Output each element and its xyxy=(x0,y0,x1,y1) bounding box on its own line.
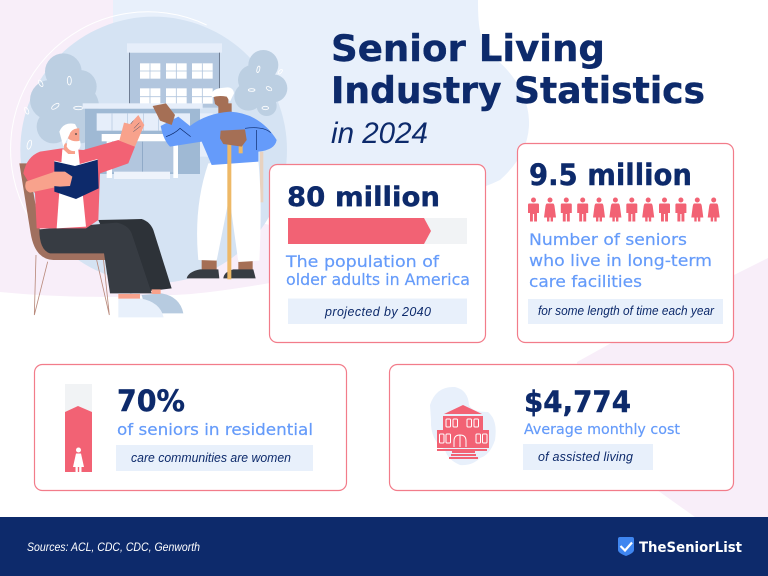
neck xyxy=(64,143,75,154)
note xyxy=(116,445,313,471)
hand on cane xyxy=(220,129,247,147)
note: of assisted living xyxy=(538,450,633,464)
description: older adults in America xyxy=(286,270,470,289)
note xyxy=(523,444,653,470)
card: $4,774 xyxy=(390,364,734,490)
progress bar xyxy=(288,218,467,244)
column chart with woman icon xyxy=(65,384,92,472)
title: Industry Statistics xyxy=(331,69,705,112)
note: projected by 2040 xyxy=(324,305,431,319)
sources: Sources: ACL, CDC, CDC, Genworth xyxy=(27,540,200,554)
chair xyxy=(34,255,109,315)
footer bar xyxy=(0,517,768,576)
raised hand xyxy=(119,115,144,147)
trousers xyxy=(197,161,261,262)
title xyxy=(331,27,705,112)
seated man with book xyxy=(19,115,183,317)
sweater xyxy=(161,112,277,165)
description: care facilities xyxy=(529,272,642,291)
head and beard xyxy=(68,128,79,142)
note: for some length of time each year xyxy=(538,304,715,318)
subtitle: in 2024 xyxy=(331,117,428,150)
back building xyxy=(127,43,222,110)
front leg xyxy=(39,223,152,293)
back leg xyxy=(98,219,172,293)
description xyxy=(529,230,712,291)
people icons xyxy=(528,198,720,222)
open book xyxy=(54,159,99,199)
logo icon xyxy=(618,537,634,556)
shoes xyxy=(187,269,256,278)
shirt xyxy=(57,149,86,228)
statistic: $4,774 xyxy=(524,385,631,419)
left tree xyxy=(30,53,100,143)
backdrop circle xyxy=(20,17,287,283)
illustration: seniors in front of a care community xyxy=(11,12,287,317)
description: Number of seniors xyxy=(529,230,687,249)
note xyxy=(288,298,467,324)
description: of seniors in residential xyxy=(117,420,313,439)
description xyxy=(285,252,470,289)
feet xyxy=(202,258,253,271)
right tree xyxy=(234,50,287,116)
note: care communities are women xyxy=(131,451,291,465)
shoes xyxy=(142,293,183,313)
logo wordmark: TheSeniorList xyxy=(639,540,742,556)
description: The population of xyxy=(285,252,439,271)
card: 70% xyxy=(34,364,346,490)
statistic: 9.5 million xyxy=(529,158,692,192)
note xyxy=(528,299,723,324)
card: 80 million xyxy=(270,164,486,342)
neck xyxy=(218,103,232,115)
raised hand xyxy=(153,103,175,125)
description: who live in long-term xyxy=(529,251,712,270)
back cane shadow xyxy=(260,152,263,202)
forearm xyxy=(25,172,58,193)
cane xyxy=(227,143,231,279)
statistic: 80 million xyxy=(287,182,440,213)
description: Average monthly cost xyxy=(524,422,680,438)
tree leaves xyxy=(24,66,283,150)
front building xyxy=(83,103,213,179)
card: 9.5 million xyxy=(518,144,734,342)
standing woman with cane xyxy=(153,87,277,279)
icon: building on blob xyxy=(430,387,496,465)
jacket xyxy=(23,140,135,228)
title: Senior Living xyxy=(331,27,605,70)
hand on book xyxy=(53,172,72,187)
head xyxy=(213,95,228,109)
statistic: 70% xyxy=(117,384,185,418)
